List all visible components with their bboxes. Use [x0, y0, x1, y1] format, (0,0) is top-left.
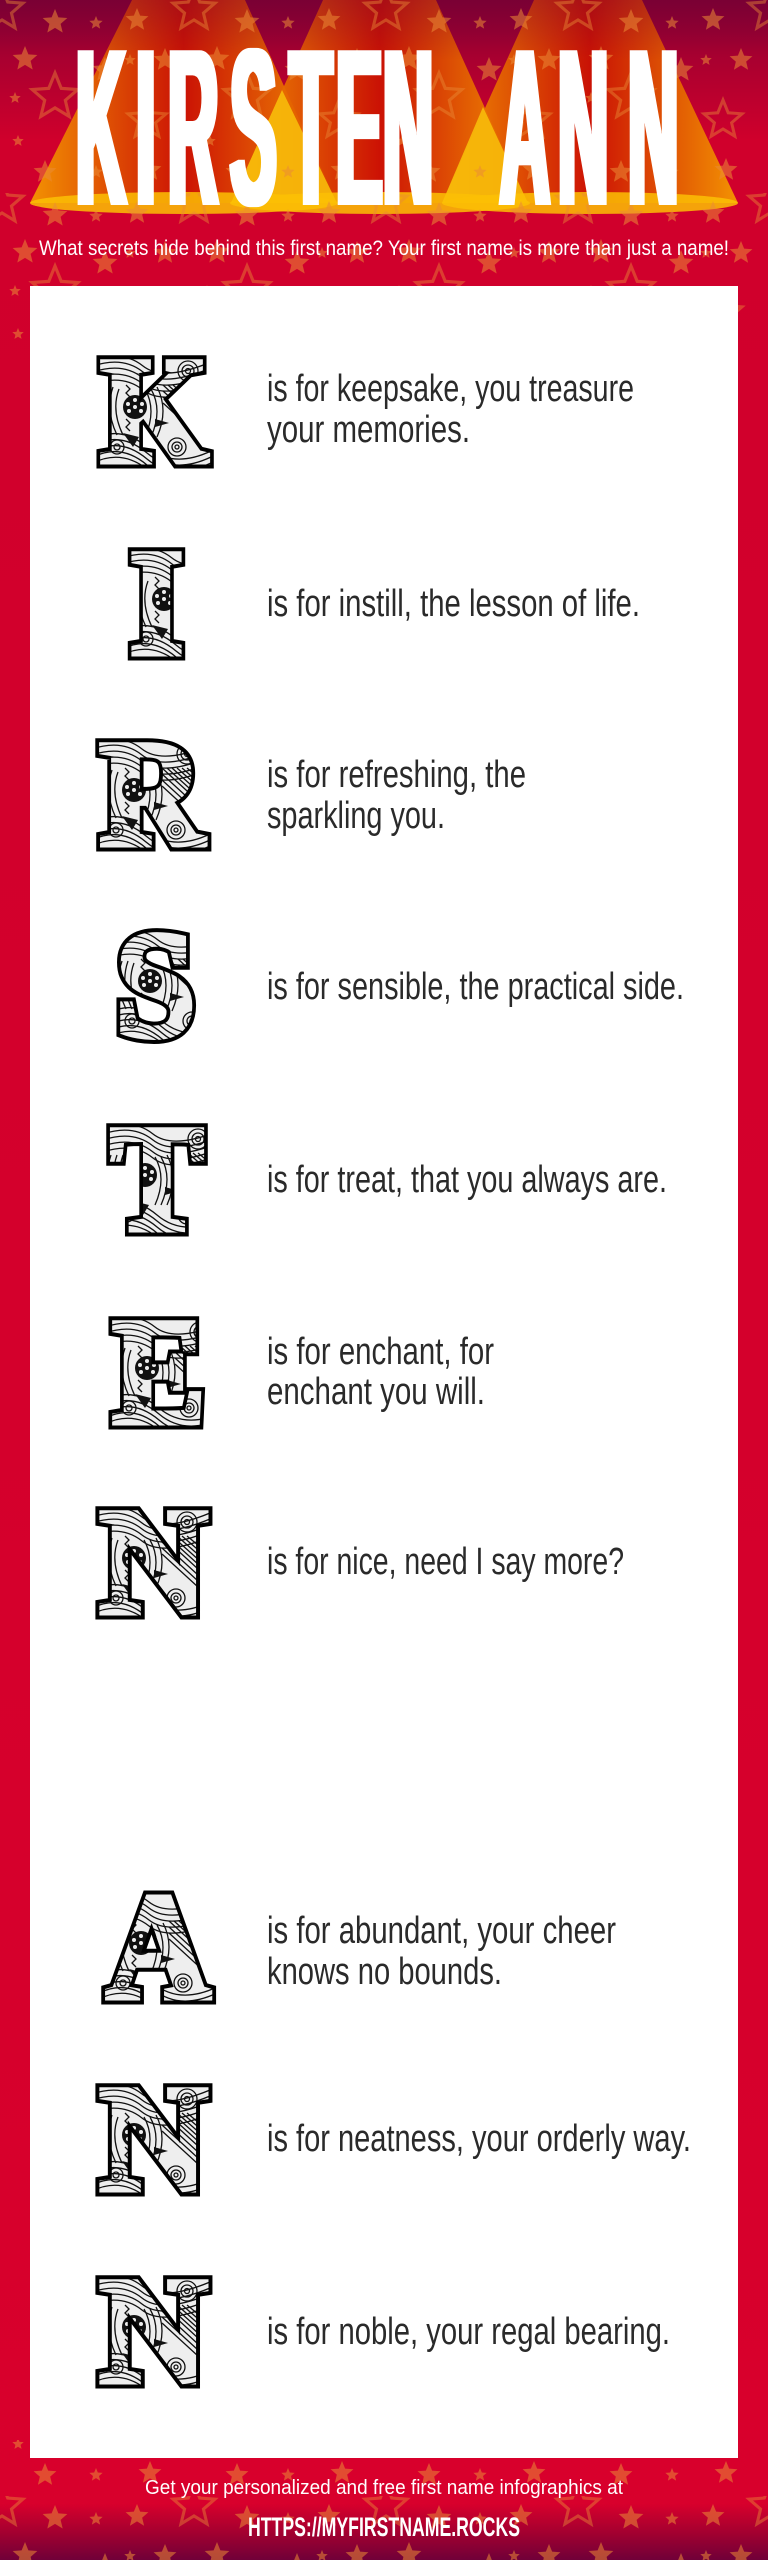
letter N row	[100, 1479, 624, 1645]
text: A line: knows no bounds.	[267, 1951, 502, 1993]
icon: letter N: N	[100, 2056, 207, 2222]
icon: letter S: S	[116, 902, 195, 1068]
icon: letter T: T	[111, 1096, 203, 1262]
icon: letter A: A	[107, 1864, 210, 2030]
icon: letter E: E	[113, 1289, 205, 1455]
text: R line: is for refreshing, the	[267, 754, 526, 796]
text: E line	[267, 1331, 494, 1413]
spotlights	[0, 0, 768, 214]
icon: letter I: I	[130, 520, 183, 686]
letter R row	[100, 711, 526, 877]
text: A line	[267, 1910, 616, 1993]
text: A line: is for abundant, your cheer	[267, 1910, 616, 1952]
letter N row 2	[100, 2056, 691, 2222]
title: KIRSTEN ANN	[76, 2, 678, 254]
letter K row	[101, 328, 634, 494]
letter E row	[113, 1289, 494, 1455]
text: K line: your memories.	[267, 409, 470, 451]
icon: letter T: T	[111, 1096, 203, 1262]
letter T row	[111, 1096, 667, 1262]
icon: letter A: A	[107, 1864, 210, 2030]
footer text: Get your personalized and free first name infographics at	[145, 2477, 623, 2499]
icon: letter N: N	[100, 1479, 207, 1645]
text: K line	[267, 368, 634, 451]
panel: white content	[30, 286, 738, 2458]
icon: letter N: N	[100, 1479, 207, 1645]
icon: letter N: N	[100, 2056, 207, 2222]
icon: letter R: R	[100, 711, 205, 877]
text: R line	[267, 754, 526, 837]
text: K line: is for keepsake, you treasure	[267, 368, 634, 410]
icon: letter N: N	[100, 2248, 207, 2414]
icon: letter K: K	[101, 328, 208, 494]
star pattern: bottom	[0, 2440, 768, 2560]
icon: letter R: R	[100, 711, 205, 877]
text: N line: is for nice, need I say more?	[267, 1541, 624, 1583]
icon: letter E: E	[113, 1289, 205, 1455]
icon: letter S: S	[116, 902, 195, 1068]
letter S row	[116, 902, 684, 1068]
icon: letter N: N	[100, 2248, 207, 2414]
text: E line: is for enchant, for	[267, 1331, 494, 1373]
icon: letter K: K	[101, 328, 208, 494]
letter N row 3	[100, 2248, 670, 2414]
footer url: HTTPS://MYFIRSTNAME.ROCKS	[248, 2512, 520, 2542]
star pattern: top	[0, 0, 768, 345]
text: E line: enchant you will.	[267, 1371, 485, 1413]
text: I line: is for instill, the lesson of life.	[267, 583, 640, 625]
icon: letter I: I	[130, 520, 183, 686]
letter I row	[130, 520, 640, 686]
letter A row	[107, 1864, 616, 2030]
text: R line: sparkling you.	[267, 795, 445, 837]
